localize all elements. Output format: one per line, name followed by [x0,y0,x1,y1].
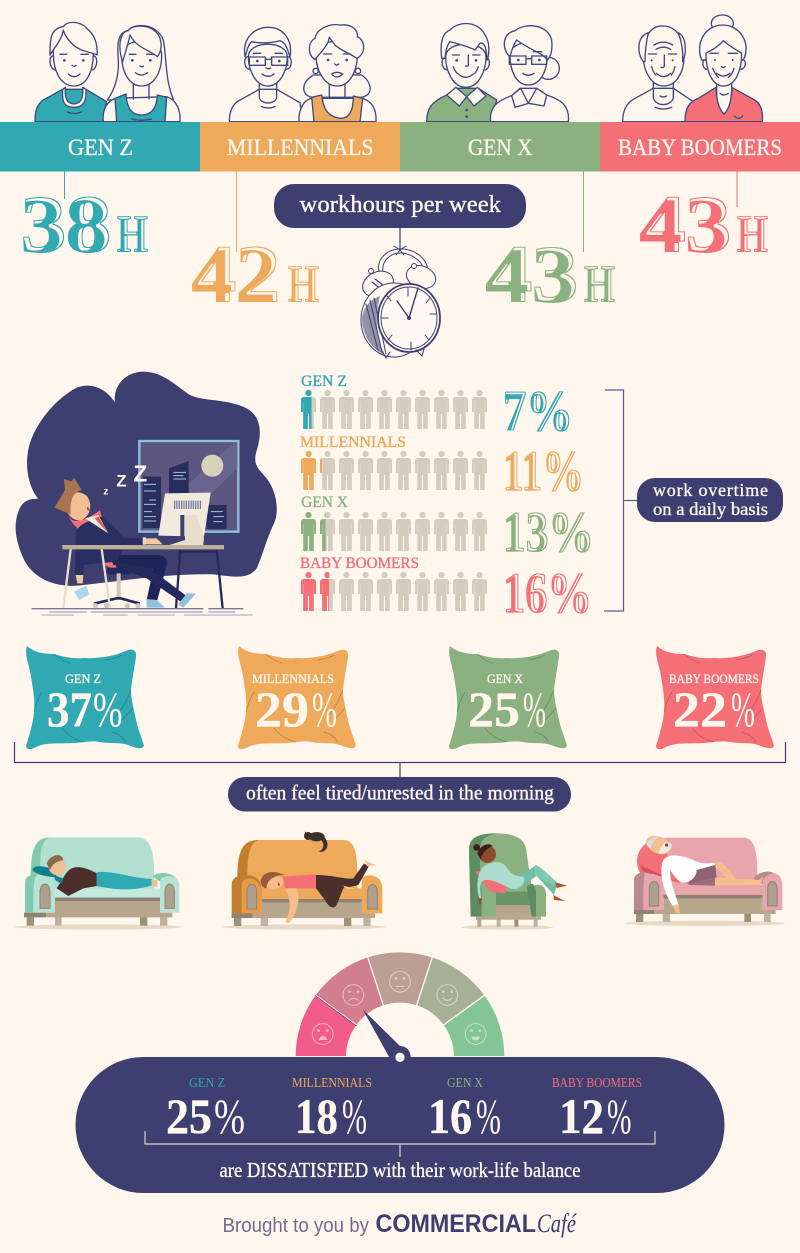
Boomer woman [685,15,763,122]
gauge segment: very unhappy [295,995,357,1057]
pillow: Baby Boomers 22% [656,646,774,749]
icon: alarm clock [358,228,440,358]
stat: Gen Z 7%: 7% [503,380,573,443]
pillow: Millennials 29%: 29 [255,681,309,737]
Gen X man [427,24,497,122]
stat: Gen Z 38 hours: H [117,206,148,264]
row label: Gen Z: GEN Z [301,373,347,390]
stat: Gen X 43 hours: H [584,256,615,314]
row label: Gen X: GEN X [301,494,348,511]
pillow: Baby Boomers 22%: % [731,681,755,737]
snore letters: Z [133,460,147,486]
Baby Boomers 12% [552,1076,642,1144]
section: work overtime headcount rows [300,373,594,625]
Millennials 18% [292,1076,372,1144]
pictogram row: Baby Boomers [301,572,487,611]
pillow: Gen Z 37%: GEN Z [65,671,101,686]
snore letters: z [103,486,108,497]
desk [62,545,224,608]
portraits: Millennials couple [229,25,376,122]
callout: work overtime on a daily basis: on a daily basis [653,499,768,519]
portraits: Baby Boomers couple [623,15,763,122]
dissatisfied panel [76,1009,724,1193]
generation bar: Gen Z: GEN Z [68,135,133,160]
footer credit: Brought to you by [222,1215,369,1237]
stat: Gen Z 38 hours: 38 [21,181,111,269]
chair [68,510,153,608]
Baby Boomers 12%: 12 [559,1088,604,1144]
spilled cup [74,586,89,600]
stat: Baby Boomers 43 hours [640,171,768,269]
Gen X 16%: 16 [428,1088,472,1144]
callout: often feel tired/unrested in the morning [14,742,786,812]
pictogram row: Millennials [301,451,487,490]
stat: Millennials 42 hours: 42 [192,231,280,319]
footer credit: COMMERCIAL [376,1210,536,1238]
gauge: satisfaction meter [295,952,505,1057]
pillow: Gen X 25%: 25 [468,681,520,737]
stat: Gen Z 38 hours [21,171,148,269]
callout: often feel tired/unrested in the morning: often feel tired/unrested in the morning [246,780,554,804]
heading pill: workhours per week [274,184,526,228]
Boomer man [623,26,697,122]
pillow: Baby Boomers 22%: 22 [673,681,727,737]
pillow: Gen X 25%: % [523,681,546,737]
Gen Z woman [103,26,180,122]
pillow: Millennials 29%: % [312,681,337,737]
gauge segment: unhappy [315,957,384,1026]
pillow: Gen X 25% [449,646,567,749]
Millennial man [229,27,303,122]
Baby Boomers 12%: % [607,1088,632,1144]
bracket [145,1131,655,1157]
Millennial woman [299,25,376,122]
pillow: Millennials 29%: MILLENNIALS [252,671,334,686]
portraits: Gen X couple [427,24,569,122]
Millennials 18%: MILLENNIALS [292,1076,372,1091]
gauge segment: happy [416,957,485,1025]
gauge needle [363,1009,411,1067]
generation bar: Millennials [200,122,400,172]
stat: Millennials 42 hours: H [288,256,319,314]
row label: Baby Boomers: BABY BOOMERS [300,555,419,572]
stat: Gen X 13%: 13% [503,501,594,564]
monitor [158,493,211,545]
caption: are DISSATISFIED with their work-life balance [220,1158,580,1182]
illustration: Gen X woman in green armchair [462,833,567,930]
stat: Gen X 43 hours: 43 [486,231,578,319]
illustration: man asleep at desk [16,372,277,615]
callout: work overtime on a daily basis [604,390,783,611]
pictogram row: Gen X [301,512,487,551]
row label: Millennials: MILLENNIALS [300,434,406,451]
pillow: Millennials 29% [238,646,356,749]
footer credit: Café [537,1209,577,1238]
floor lines [32,609,253,615]
Gen Z 25%: GEN Z [189,1076,225,1091]
Gen Z man [35,22,107,122]
generation bar: Gen X: GEN X [468,135,533,160]
window with city at night [139,441,238,532]
Millennials 18%: % [342,1088,367,1144]
stat: Baby Boomers 43 hours: H [737,206,768,264]
Baby Boomers 12%: BABY BOOMERS [552,1076,642,1091]
heading pill: workhours per week: workhours per week [300,192,501,218]
Gen Z 25%: % [214,1088,245,1144]
Gen Z 25% [166,1076,245,1144]
stat: Millennials 42 hours [192,171,319,319]
Gen X woman [490,26,569,122]
blob background [16,372,277,586]
illustration: Boomer man on pink sofa [625,832,785,926]
pillow: Gen X 25%: GEN X [487,671,524,686]
footer credit [222,1209,577,1238]
Gen X 16%: % [476,1088,501,1144]
pictogram row: Gen Z [301,390,487,429]
stat: Gen X 43 hours [486,171,615,319]
generation bar: Millennials: MILLENNIALS [227,135,374,160]
pillow: Gen Z 37%: % [93,681,122,737]
snore letters: Z [116,471,127,490]
generation bar: Gen X [400,122,600,172]
callout: work overtime on a daily basis: work overtime [653,480,768,500]
pillow: Baby Boomers 22%: BABY BOOMERS [669,671,759,686]
Gen X 16%: GEN X [447,1076,483,1091]
gauge segment: very happy [443,995,505,1057]
gauge segment: neutral [368,952,432,1006]
Gen X 16% [428,1076,501,1144]
Millennials 18%: 18 [295,1088,338,1144]
stat: Baby Boomers 43 hours: 43 [640,181,731,269]
stat: Baby Boomers 16%: 16% [503,562,592,625]
snore letters [103,460,147,497]
generation bar: Baby Boomers [600,122,800,172]
illustration: Millennial woman and cat on orange sofa [222,831,386,930]
generation bar: Baby Boomers: BABY BOOMERS [618,135,782,160]
pillow: Gen Z 37% [26,646,144,749]
generation bar: Gen Z [0,122,200,172]
sleeping man [54,478,196,608]
illustration: Gen Z man on mint sofa [14,837,182,930]
Gen Z 25%: 25 [166,1088,212,1144]
pillow: Gen Z 37%: 37 [47,681,92,737]
stat: Millennials 11%: 11% [503,440,584,503]
portraits: Gen Z couple [35,22,180,122]
